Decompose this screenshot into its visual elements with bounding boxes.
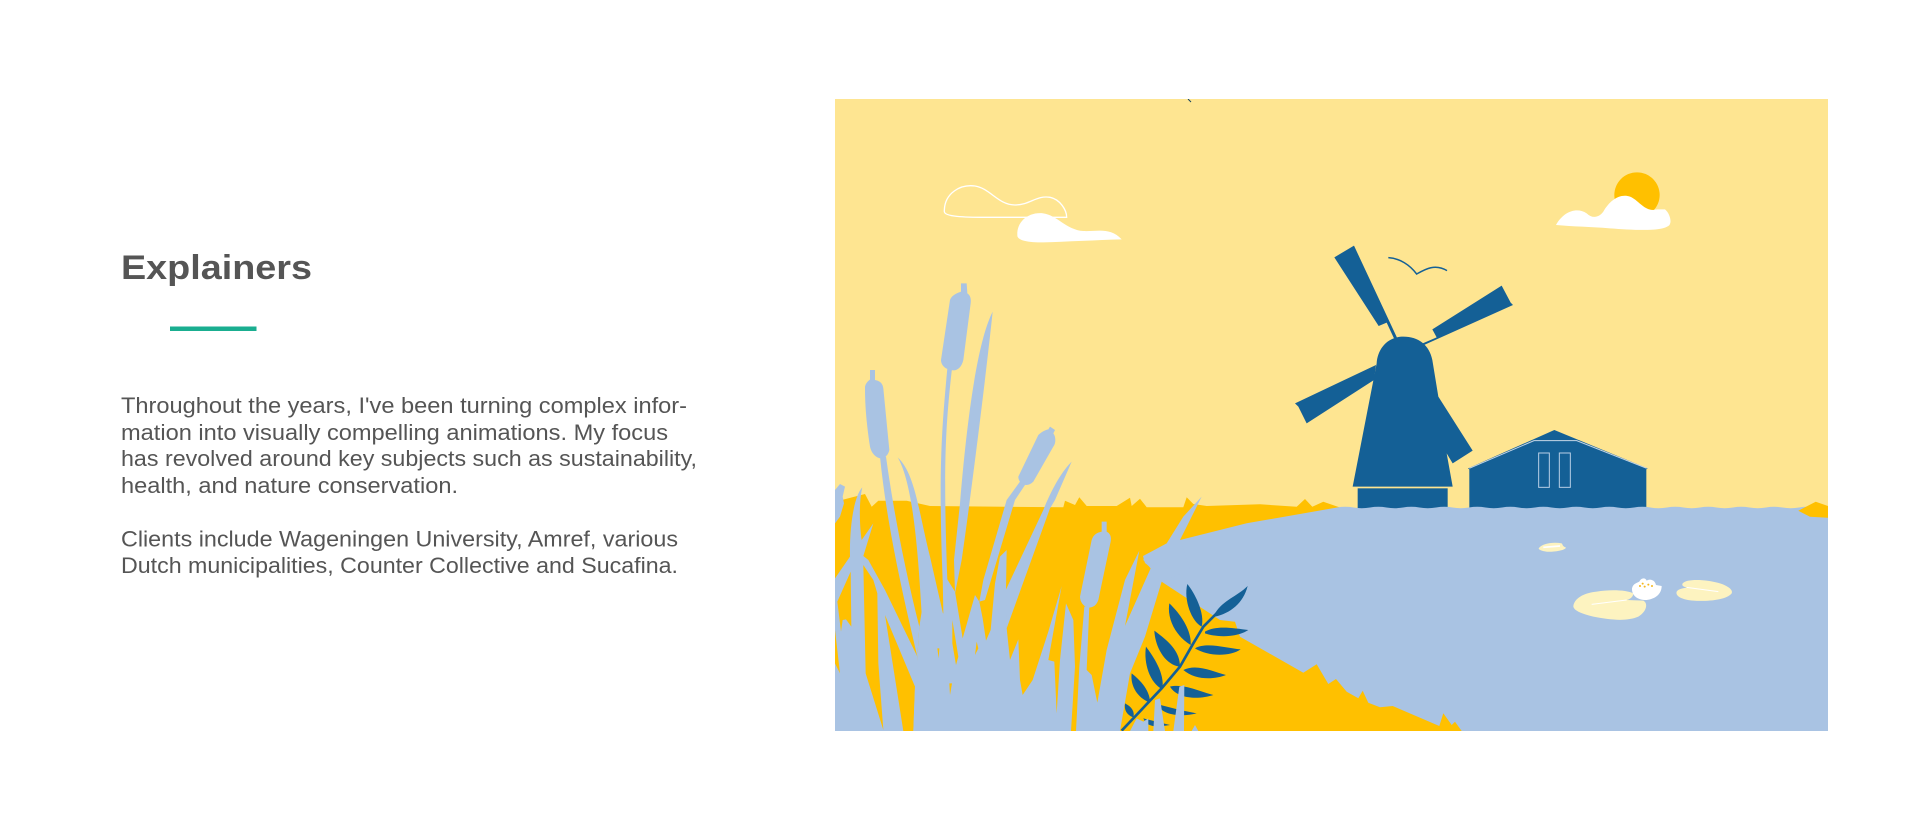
flying bird (1388, 258, 1447, 274)
yellow field (835, 494, 1470, 731)
clouds: outline and solid (944, 186, 1122, 242)
water lily flower (1632, 578, 1662, 600)
title: Explainers (121, 249, 312, 287)
windmill tower (1353, 337, 1473, 487)
central reed mass (913, 550, 1075, 731)
reeds and cattails (835, 283, 1202, 731)
water (1143, 507, 1832, 731)
sun and cloud (1556, 172, 1671, 230)
text block: introduction: has revolved around key subjects such as sustainability, (121, 446, 697, 471)
text block: introduction: mation into visually compelling animations. My focus (121, 420, 668, 445)
windmill (1295, 246, 1513, 509)
tall leaf (954, 312, 993, 593)
sky (835, 99, 1828, 508)
far-left cattail tip (835, 484, 845, 523)
accent divider (170, 326, 256, 331)
curved reed leaf (898, 457, 943, 615)
cattail 2 (941, 283, 971, 580)
cattail 1 (865, 370, 919, 657)
front reed tips over branch (1130, 685, 1198, 731)
left reed mass (835, 487, 917, 731)
small yellow gaps in central reeds (937, 620, 978, 695)
text block: clients (121, 526, 678, 578)
windmill blades (1295, 246, 1513, 423)
leafy branch (1122, 584, 1248, 731)
windmill base (1358, 488, 1448, 509)
boathouse (1468, 430, 1648, 509)
cattail 3 (979, 427, 1055, 602)
text block: introduction (121, 393, 697, 498)
reed leaf right of cattail 3 (1005, 462, 1072, 628)
small bird mark at top edge (1188, 99, 1191, 102)
right reed and shoreline blade (1076, 497, 1202, 731)
far-right yellow bank (1798, 502, 1828, 518)
water lily pads (1539, 543, 1732, 620)
text block: introduction: Throughout the years, I've been turning complex infor- (121, 393, 687, 418)
yellow gaps in left reeds (835, 565, 915, 731)
text block: clients: Clients include Wageningen University, Amref, various (121, 526, 678, 552)
text block: clients: Dutch municipalities, Counter Collective and Sucafina. (121, 553, 678, 578)
illustration: windmill landscape (835, 99, 1832, 731)
text block: introduction: health, and nature conservation. (121, 473, 458, 498)
cattail 4 head (1080, 522, 1111, 608)
